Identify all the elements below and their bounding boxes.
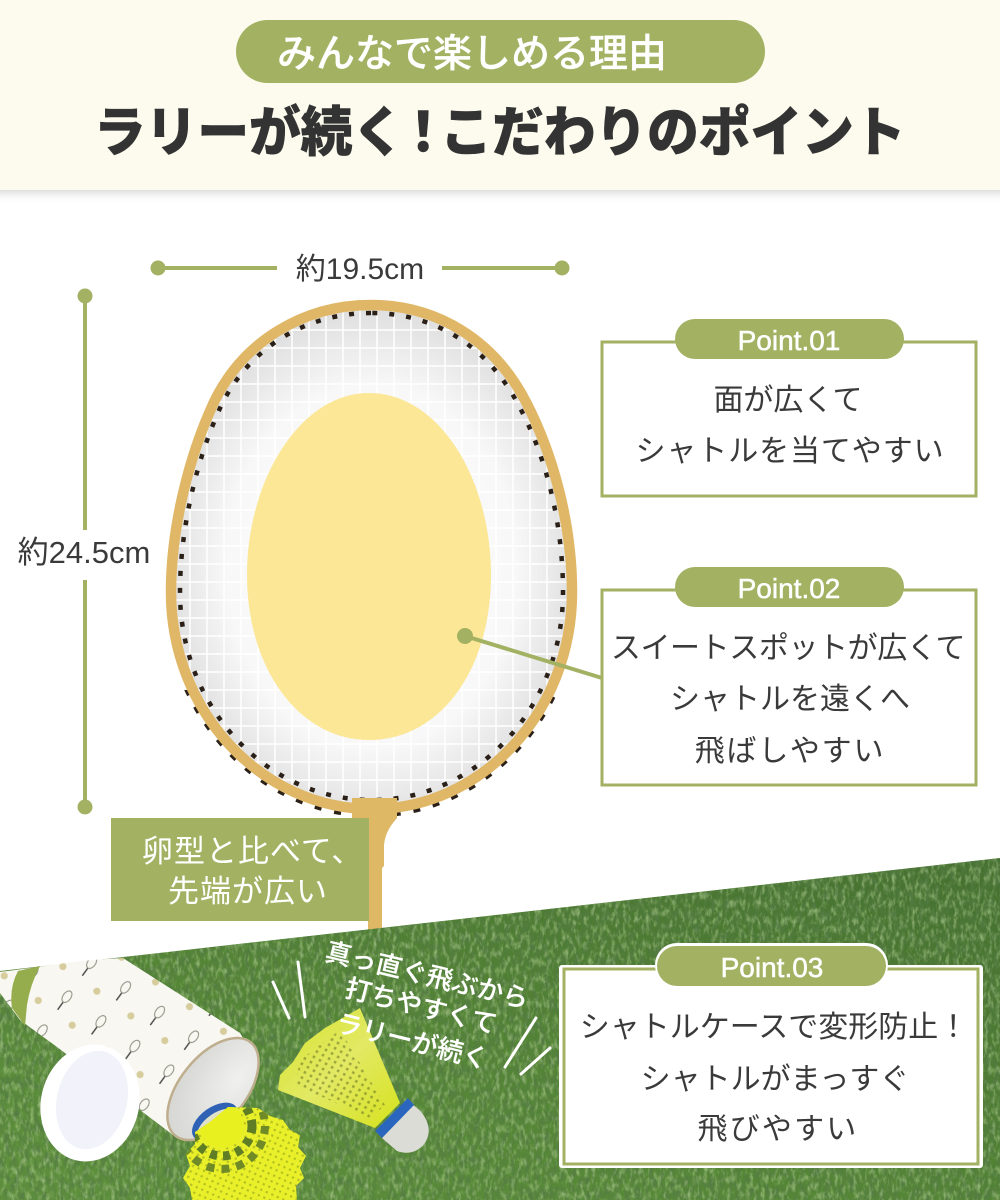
point 01 text: 面が広くて [713, 384, 863, 417]
point 02 text [611, 632, 965, 768]
width dimension: about 19.5cm [150, 253, 570, 286]
width dimension: about 19.5cm: 約19.5cm [296, 253, 424, 286]
panel: point 01 [602, 319, 976, 496]
racket frame [171, 305, 572, 809]
header background [0, 0, 1000, 190]
cork [382, 1105, 429, 1153]
point 02 text: 飛ばしやすい [695, 735, 885, 768]
racket throat joint [352, 798, 397, 818]
shuttle ribs and holes [186, 1107, 269, 1173]
height dimension: about 24.5cm [18, 288, 150, 814]
callout: wider tip: 先端が広い [168, 874, 328, 909]
tube opening [150, 1022, 276, 1156]
point 03 text: シャトルがまっすぐ [641, 1063, 909, 1096]
badge: Point.01: Point.01 [738, 325, 840, 356]
shuttlecock inside the case [183, 1102, 306, 1200]
motion ticks [273, 962, 550, 1074]
sweet spot [247, 393, 491, 740]
angled caption: 真っ直ぐ飛ぶから [322, 936, 532, 1014]
tube green band [11, 966, 40, 1026]
point 03 text [580, 1011, 968, 1146]
header band [0, 0, 1000, 190]
racket [160, 300, 580, 935]
racket outer grommets [184, 690, 556, 816]
angled caption: 打ちやすくて [342, 973, 500, 1040]
skirt [278, 1008, 400, 1128]
connector: sweet spot to point 02 [457, 628, 602, 678]
blue band [375, 1098, 414, 1138]
shuttle blue cap [185, 1095, 245, 1149]
badge: Point.01 [675, 319, 904, 359]
title: ラリーが続く！こだわりのポイント [94, 102, 905, 163]
racket handle [352, 798, 397, 935]
angled caption: ラリーが続く [333, 1008, 491, 1075]
subtitle pill: みんなで楽しめる理由 [277, 33, 667, 76]
point 03 text: 飛びやすい [698, 1113, 858, 1146]
point 01 text: シャトルを当てやすい [636, 435, 944, 468]
point 02 text: シャトルを遠くへ [670, 683, 910, 716]
callout: wider tip: 卵型と比べて、 [142, 834, 363, 869]
callout: wider tip [111, 818, 369, 921]
strings [176, 310, 566, 802]
subtitle pill [236, 20, 765, 83]
racket inner grommets [180, 313, 563, 800]
point 01 text [636, 384, 944, 468]
panel: point 03 [559, 943, 983, 1168]
point 03 text: シャトルケースで変形防止！ [580, 1011, 968, 1044]
badge: Point.02: Point.02 [738, 573, 840, 604]
skirt holes [295, 1030, 385, 1118]
case lid [28, 1034, 152, 1172]
angled caption [322, 936, 532, 1075]
badge: Point.03: Point.03 [721, 952, 823, 983]
badge: Point.03 [655, 943, 888, 987]
badge: Point.02 [675, 567, 904, 607]
tube body [0, 958, 258, 1138]
shuttlecock on the grass [278, 1008, 429, 1153]
racket string bed [171, 305, 572, 809]
shuttle skirt [183, 1107, 306, 1200]
grass photo background [0, 850, 1000, 1200]
shuttle case tube [0, 958, 276, 1172]
height dimension: about 24.5cm: 約24.5cm [18, 535, 150, 570]
point 02 text: スイートスポットが広くて [611, 632, 965, 665]
panel: point 02 [602, 567, 976, 785]
